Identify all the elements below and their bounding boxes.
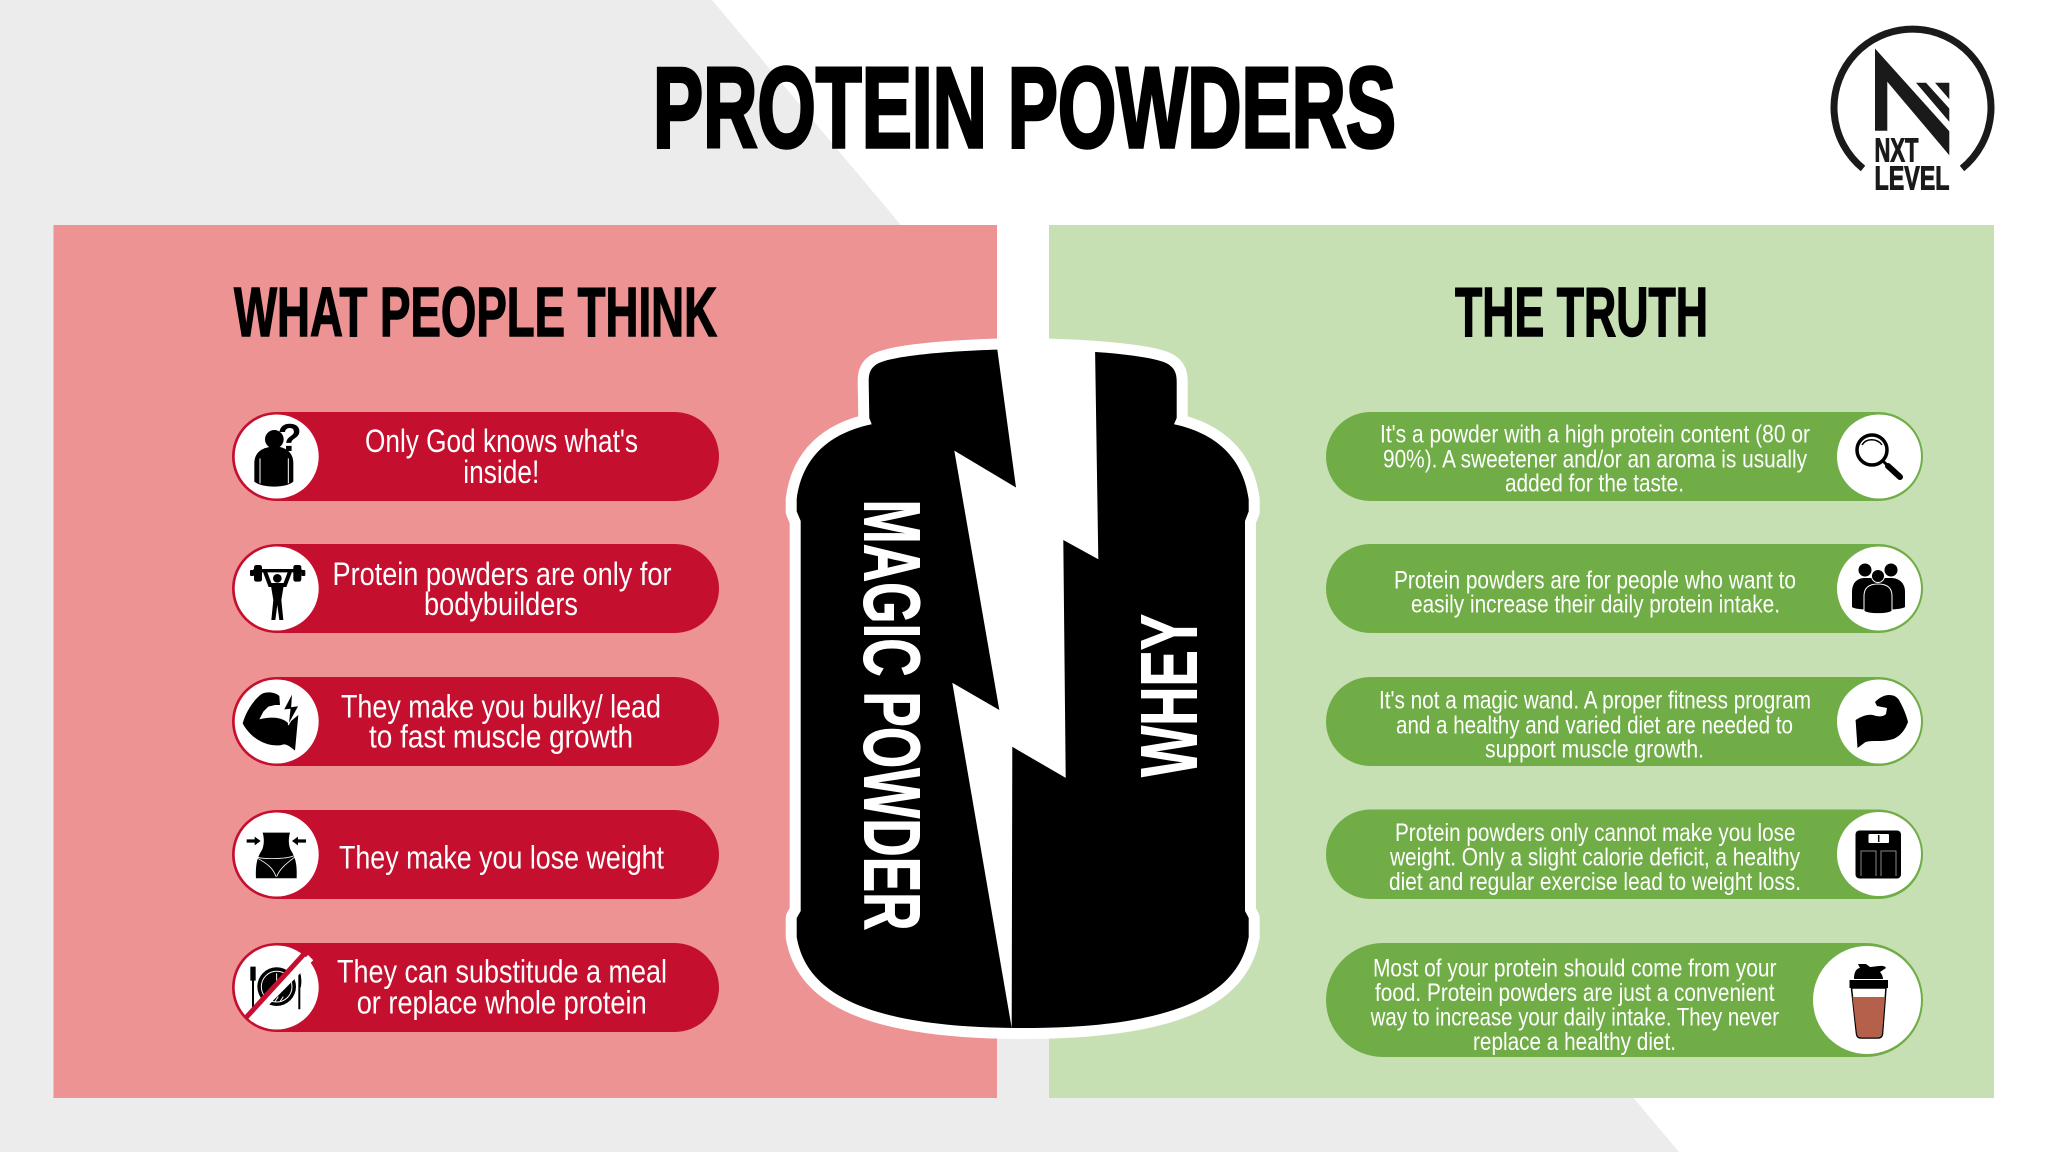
truth text 4: weight. Only a slight calorie deficit, a healthy [1389, 844, 1800, 872]
truth text 4: diet and regular exercise lead to weight loss. [1389, 868, 1801, 896]
myth pill 4 [232, 810, 719, 899]
myth text 2: Protein powders are only for [332, 556, 672, 592]
panel: the truth [1049, 225, 1994, 1098]
truth text 5: replace a healthy diet. [1473, 1028, 1676, 1056]
label: whey: WHEY [1125, 614, 1214, 777]
panel: what people think [54, 225, 997, 1098]
myth pill 1 [232, 412, 719, 501]
logo: NXT Level: LEVEL [1874, 160, 1950, 196]
heading: what people think: WHAT PEOPLE THINK [234, 273, 717, 351]
myth text 1: inside! [463, 454, 539, 490]
myth text 4: They make you lose weight [339, 839, 664, 875]
truth text 5: way to increase your daily intake. They never [1370, 1004, 1779, 1032]
icon: flexed arm [1856, 695, 1908, 748]
truth text 1: 90%). A sweetener and/or an aroma is usually [1383, 445, 1807, 473]
heading: the truth: THE TRUTH [1455, 273, 1708, 351]
label: magic powder: MAGIC POWDER [847, 500, 936, 930]
icon: bathroom scale [1856, 830, 1901, 878]
myth text 5 [337, 954, 667, 1020]
truth text 3: and a healthy and varied diet are needed to [1396, 711, 1793, 739]
myth pill 3 [232, 677, 719, 766]
truth text 5: Most of your protein should come from your [1373, 955, 1776, 983]
truth text 4: Protein powders only cannot make you lose [1395, 819, 1796, 847]
truth text 2: easily increase their daily protein intake. [1411, 591, 1780, 619]
myth text 1: Only God knows what's [365, 423, 638, 459]
myth text 3: to fast muscle growth [369, 719, 633, 755]
title: PROTEIN POWDERS [653, 45, 1396, 172]
truth text 3 [1379, 686, 1811, 764]
truth text 3: support muscle growth. [1485, 736, 1704, 764]
truth text 4 [1389, 819, 1801, 896]
truth text 5 [1370, 955, 1779, 1056]
jar black body [797, 349, 1249, 1028]
myth pill 5 [232, 943, 719, 1032]
icon: shaker bottle [1850, 964, 1888, 1038]
truth pill 5 [1326, 943, 1923, 1057]
logo: NXT Level: NXT [1874, 132, 1918, 168]
truth pill 1 [1326, 412, 1923, 501]
truth text 2 [1394, 566, 1796, 619]
myth pill 2 [232, 544, 719, 633]
icon: group of people [1852, 564, 1905, 614]
icon: magnifying glass [1857, 435, 1900, 477]
icon: muscle with lightning [243, 692, 299, 751]
truth text 1: added for the taste. [1505, 470, 1684, 498]
truth text 2: Protein powders are for people who want to [1394, 566, 1796, 594]
jar white outline [797, 349, 1249, 1028]
lightning bolt [952, 345, 1098, 1028]
myth text 2 [332, 556, 672, 622]
myth text 5: They can substitude a meal [337, 954, 667, 990]
truth text 1: It's a powder with a high protein content (80 or [1380, 421, 1810, 449]
logo: NXT Level [1834, 29, 1991, 196]
myth text 5: or replace whole protein [357, 984, 647, 1020]
truth text 1 [1380, 421, 1810, 498]
myth text 3 [341, 688, 661, 755]
truth text 3: It's not a magic wand. A proper fitness program [1379, 686, 1811, 714]
truth pill 4 [1326, 810, 1923, 899]
myth text 1 [365, 423, 638, 490]
icon: waist [247, 833, 306, 878]
icon: person with question mark: ? [278, 416, 302, 460]
truth text 5: food. Protein powders are just a convenient [1375, 979, 1775, 1007]
icon: person with question mark [254, 416, 302, 487]
icon: weightlifter [250, 565, 305, 620]
myth text 2: bodybuilders [424, 586, 578, 622]
icon: crossed out meal [246, 953, 311, 1019]
myth text 3: They make you bulky/ lead [341, 688, 661, 724]
truth pill 2 [1326, 544, 1923, 633]
truth pill 3 [1326, 677, 1923, 766]
central protein jar [797, 345, 1249, 1028]
